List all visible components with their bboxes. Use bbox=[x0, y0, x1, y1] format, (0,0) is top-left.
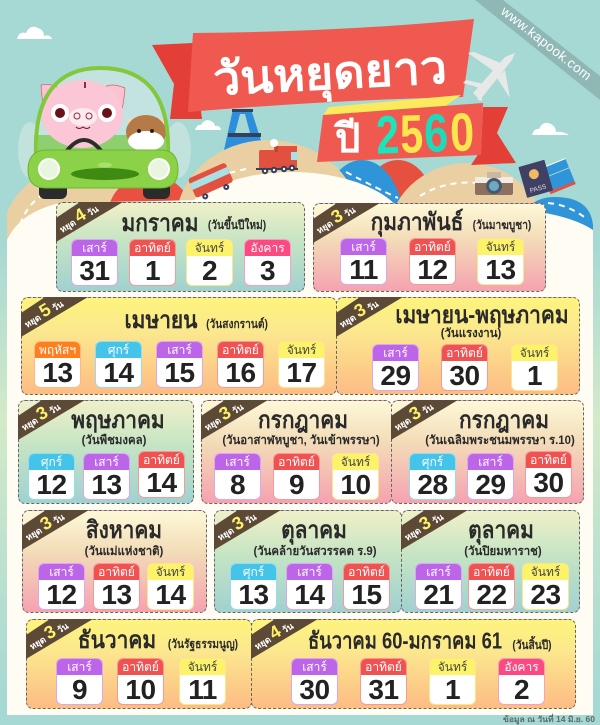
date card: อาทิตย์ bbox=[222, 343, 259, 357]
panel: July Asalha bbox=[201, 400, 392, 504]
watermark strip: www.kapook.com bbox=[497, 3, 595, 83]
date card bbox=[83, 453, 130, 500]
date card: 12 bbox=[36, 469, 67, 500]
illustration: green car with pig and hamster bbox=[28, 68, 178, 199]
date card: พฤหัสฯ bbox=[39, 343, 76, 357]
date card: 16 bbox=[225, 357, 256, 388]
banner: title ribbon bbox=[188, 19, 474, 112]
ribbon: 3 days bbox=[24, 614, 93, 659]
date card: 1 bbox=[527, 360, 542, 391]
subheading: (วันขึ้นปีใหม่) bbox=[208, 218, 266, 232]
ribbon: 4 days: หยุด 4 วัน bbox=[54, 197, 102, 236]
date card: อาทิตย์ bbox=[365, 660, 402, 674]
ribbon: 3 days bbox=[20, 505, 89, 550]
date card bbox=[147, 563, 194, 610]
ribbon: 3 days bbox=[334, 292, 403, 337]
year number: 5 bbox=[399, 104, 424, 165]
date card bbox=[332, 453, 379, 500]
title text: วันหยุดยาว bbox=[212, 41, 448, 108]
ribbon: 3 days: หยุด 3 วัน bbox=[24, 614, 72, 653]
ribbon: 3 days: หยุด 3 วัน bbox=[399, 505, 447, 544]
date card bbox=[343, 563, 390, 610]
date card bbox=[340, 238, 387, 285]
date card bbox=[93, 563, 140, 610]
date card: ศุกร์ bbox=[422, 455, 443, 469]
date card: ศุกร์ bbox=[41, 455, 62, 469]
date card bbox=[230, 563, 277, 610]
ribbon: 3 days bbox=[199, 395, 268, 440]
heading: มกราคม bbox=[121, 210, 199, 237]
date card: เสาร์ bbox=[302, 660, 327, 674]
date card: 12 bbox=[46, 579, 77, 610]
date card bbox=[117, 658, 164, 705]
ribbon: 3 days bbox=[399, 505, 468, 550]
panel: January bbox=[56, 202, 305, 292]
subheading: (วันพืชมงคล) bbox=[82, 433, 146, 447]
subheading: (วันคล้ายวันสวรรคต ร.9) bbox=[253, 544, 377, 558]
date card: จันทร์ bbox=[438, 660, 467, 674]
date card bbox=[409, 453, 456, 500]
date card: 28 bbox=[417, 469, 448, 500]
date card: 13 bbox=[91, 469, 122, 500]
pig ears bbox=[41, 85, 125, 112]
cream page panel bbox=[7, 200, 593, 715]
date card: 8 bbox=[230, 469, 245, 500]
heading: สิงหาคม bbox=[86, 517, 162, 544]
date card: ศุกร์ bbox=[108, 343, 129, 357]
year label: ปี bbox=[333, 117, 360, 161]
date card bbox=[291, 658, 338, 705]
date card bbox=[28, 453, 75, 500]
watermark strip bbox=[475, 0, 600, 100]
date card: อาทิตย์ bbox=[122, 660, 159, 674]
date card: 13 bbox=[238, 579, 269, 610]
panel: December Constitution bbox=[26, 619, 252, 709]
icon: passport: PASS bbox=[529, 183, 548, 195]
subheading: (วันอาสาฬหบูชา, วันเข้าพรรษา) bbox=[222, 433, 380, 447]
date card: เสาร์ bbox=[297, 565, 322, 579]
ribbon: 3 days: หยุด 3 วัน bbox=[311, 198, 359, 237]
subheading: (วันสงกรานต์) bbox=[206, 317, 268, 331]
subheading: (วันแม่แห่งชาติ) bbox=[85, 544, 163, 558]
year number: 0 bbox=[449, 102, 475, 163]
date card: เสาร์ bbox=[49, 565, 74, 579]
date card: 1 bbox=[445, 674, 460, 705]
date card bbox=[217, 341, 264, 388]
date card bbox=[138, 451, 185, 498]
date card: จันทร์ bbox=[486, 240, 515, 254]
date card: 13 bbox=[42, 357, 73, 388]
date card: 9 bbox=[289, 469, 304, 500]
date card bbox=[214, 453, 261, 500]
date card: อาทิตย์ bbox=[530, 453, 567, 467]
hamster bbox=[126, 115, 166, 151]
headlights bbox=[39, 159, 169, 179]
date card: จันทร์ bbox=[341, 455, 370, 469]
date card: 31 bbox=[79, 255, 110, 286]
date card: จันทร์ bbox=[156, 565, 185, 579]
ribbon: 3 days: หยุด 3 วัน bbox=[389, 395, 437, 434]
date card: 30 bbox=[449, 360, 480, 391]
date card: 29 bbox=[475, 469, 506, 500]
windshield bbox=[36, 68, 168, 155]
icon: passport bbox=[518, 160, 553, 198]
date card bbox=[498, 658, 545, 705]
panel: April to May bbox=[336, 297, 580, 395]
ribbon: 3 days bbox=[311, 198, 380, 243]
heading: เมษายน bbox=[125, 307, 197, 334]
car frame bbox=[36, 68, 168, 155]
date card: อังคาร bbox=[250, 241, 285, 255]
date card bbox=[286, 563, 333, 610]
date card: 14 bbox=[146, 467, 177, 498]
date card bbox=[525, 451, 572, 498]
date card: 11 bbox=[188, 674, 217, 705]
ribbon: 3 days bbox=[16, 395, 85, 440]
date card: 23 bbox=[530, 579, 561, 610]
date card: อาทิตย์ bbox=[414, 240, 451, 254]
ribbon: 3 days: หยุด 3 วัน bbox=[212, 505, 260, 544]
heading: พฤษภาคม bbox=[71, 407, 165, 434]
date card: 2 bbox=[202, 255, 217, 286]
date card: 14 bbox=[155, 579, 186, 610]
date card: เสาร์ bbox=[67, 660, 92, 674]
date card bbox=[71, 239, 118, 286]
date card: เสาร์ bbox=[426, 565, 451, 579]
date card: จันทร์ bbox=[195, 241, 224, 255]
date card bbox=[372, 344, 419, 391]
icon: tickets bbox=[540, 158, 576, 194]
ribbon: 3 days: หยุด 3 วัน bbox=[199, 395, 247, 434]
heading: กรกฎาคม bbox=[459, 407, 549, 434]
subheading: (วันแรงงาน) bbox=[441, 326, 501, 340]
date card: 3 bbox=[260, 255, 275, 286]
date card bbox=[244, 239, 291, 286]
date card: 30 bbox=[299, 674, 330, 705]
heading: เมษายน-พฤษภาคม bbox=[395, 302, 569, 329]
date card bbox=[95, 341, 142, 388]
clouds bbox=[17, 27, 569, 135]
credit line: ข้อมูล ณ วันที่ 14 มิ.ย. 60 bbox=[503, 713, 596, 725]
date card: 31 bbox=[368, 674, 399, 705]
cream hill bbox=[176, 172, 408, 292]
panel: New Year 60-61 bbox=[251, 619, 576, 709]
date card bbox=[34, 341, 81, 388]
ribbon: 5 days bbox=[19, 292, 88, 337]
date card bbox=[156, 341, 203, 388]
date card bbox=[129, 239, 176, 286]
banner: main ribbon tail bbox=[152, 43, 202, 119]
date card: เสาร์ bbox=[82, 241, 107, 255]
date card: จันทร์ bbox=[188, 660, 217, 674]
date card bbox=[278, 341, 325, 388]
date card bbox=[56, 658, 103, 705]
date card bbox=[441, 344, 488, 391]
heading: ตุลาคม bbox=[281, 517, 347, 544]
subheading: (วันมาฆบูชา) bbox=[473, 218, 531, 232]
icon: train bbox=[256, 139, 298, 173]
date card bbox=[273, 453, 320, 500]
panel: May Ploughing bbox=[18, 400, 194, 504]
date card: 17 bbox=[286, 357, 317, 388]
date card bbox=[429, 658, 476, 705]
date card: อาทิตย์ bbox=[278, 455, 315, 469]
date card: 1 bbox=[145, 255, 160, 286]
date card: อาทิตย์ bbox=[446, 346, 483, 360]
date card bbox=[360, 658, 407, 705]
subheading: (วันปิยมหาราช) bbox=[464, 544, 542, 558]
ribbon: 4 days bbox=[249, 614, 318, 659]
date card: จันทร์ bbox=[287, 343, 316, 357]
date card: อาทิตย์ bbox=[473, 565, 510, 579]
year number bbox=[375, 102, 475, 166]
date card: อาทิตย์ bbox=[98, 565, 135, 579]
ribbon: 3 days: หยุด 3 วัน bbox=[20, 505, 68, 544]
heading: กุมภาพันธ์ bbox=[371, 209, 463, 236]
date card: 14 bbox=[103, 357, 134, 388]
ribbon: 3 days bbox=[389, 395, 458, 440]
date card: เสาร์ bbox=[225, 455, 250, 469]
date card bbox=[511, 344, 558, 391]
panel: October memorial bbox=[214, 510, 402, 613]
panel: October Chulalongkorn bbox=[401, 510, 580, 613]
panel: April Songkran bbox=[21, 297, 337, 395]
date card: เสาร์ bbox=[94, 455, 119, 469]
date card: 10 bbox=[340, 469, 371, 500]
date card: 30 bbox=[533, 467, 564, 498]
icon: camera bbox=[475, 172, 513, 195]
car wheels bbox=[39, 180, 170, 199]
date card: เสาร์ bbox=[383, 346, 408, 360]
date card: จันทร์ bbox=[531, 565, 560, 579]
date card: 12 bbox=[417, 254, 448, 285]
date card: เสาร์ bbox=[478, 455, 503, 469]
date card: 14 bbox=[294, 579, 325, 610]
date card bbox=[179, 658, 226, 705]
pig bbox=[41, 80, 123, 148]
date card: 15 bbox=[351, 579, 382, 610]
date card: 9 bbox=[72, 674, 87, 705]
date card: อาทิตย์ bbox=[348, 565, 385, 579]
banner: year ribbon bbox=[317, 102, 483, 166]
heading: ตุลาคม bbox=[468, 517, 534, 544]
date card: 10 bbox=[125, 674, 156, 705]
hills bbox=[7, 140, 593, 317]
icon: tram bbox=[188, 162, 235, 202]
ribbon: 3 days bbox=[212, 505, 281, 550]
subheading: (วันรัฐธรรมนูญ) bbox=[168, 637, 238, 651]
subheading: (วันสิ้นปี) bbox=[512, 638, 552, 652]
icon: airplane bbox=[463, 52, 515, 101]
date card bbox=[409, 238, 456, 285]
date card: เสาร์ bbox=[167, 343, 192, 357]
date card: เสาร์ bbox=[351, 240, 376, 254]
date card: 13 bbox=[485, 254, 516, 285]
date card: 15 bbox=[164, 357, 195, 388]
icon: eiffel tower bbox=[224, 109, 264, 150]
steering wheel bbox=[66, 140, 102, 152]
date card bbox=[467, 453, 514, 500]
banner: yellow fold bbox=[323, 95, 461, 115]
date card: 22 bbox=[476, 579, 507, 610]
date card: อาทิตย์ bbox=[143, 453, 180, 467]
heading: กรกฎาคม bbox=[258, 407, 348, 434]
date card bbox=[477, 238, 524, 285]
year number: 2 bbox=[375, 105, 400, 166]
ribbon: 4 days bbox=[54, 197, 123, 242]
smoke behind car bbox=[18, 122, 191, 178]
date card: 11 bbox=[349, 254, 378, 285]
heading: ธันวาคม 60-มกราคม 61 bbox=[308, 628, 502, 654]
subheading: (วันเฉลิมพระชนมพรรษา ร.10) bbox=[425, 433, 575, 447]
banner: year ribbon tail bbox=[471, 107, 516, 165]
panel: July King birthday bbox=[391, 400, 584, 504]
date card: 2 bbox=[514, 674, 529, 705]
date card: 21 bbox=[423, 579, 454, 610]
panel: August bbox=[22, 510, 207, 613]
date card: จันทร์ bbox=[520, 346, 549, 360]
date card: ศุกร์ bbox=[243, 565, 264, 579]
car body bbox=[28, 150, 178, 188]
date card bbox=[468, 563, 515, 610]
date card bbox=[38, 563, 85, 610]
ribbon: 5 days: หยุด 5 วัน bbox=[19, 292, 67, 331]
date card: อาทิตย์ bbox=[134, 241, 171, 255]
date card: 29 bbox=[380, 360, 411, 391]
date card bbox=[522, 563, 569, 610]
date card: 13 bbox=[101, 579, 132, 610]
date card bbox=[186, 239, 233, 286]
ribbon: 3 days: หยุด 3 วัน bbox=[16, 395, 64, 434]
ribbon: 3 days: หยุด 3 วัน bbox=[334, 292, 382, 331]
heading: ธันวาคม bbox=[78, 627, 156, 654]
ribbon: 4 days: หยุด 4 วัน bbox=[249, 614, 297, 653]
date card bbox=[415, 563, 462, 610]
year number: 6 bbox=[423, 103, 449, 164]
date card: อังคาร bbox=[504, 660, 539, 674]
panel: February bbox=[313, 203, 546, 292]
